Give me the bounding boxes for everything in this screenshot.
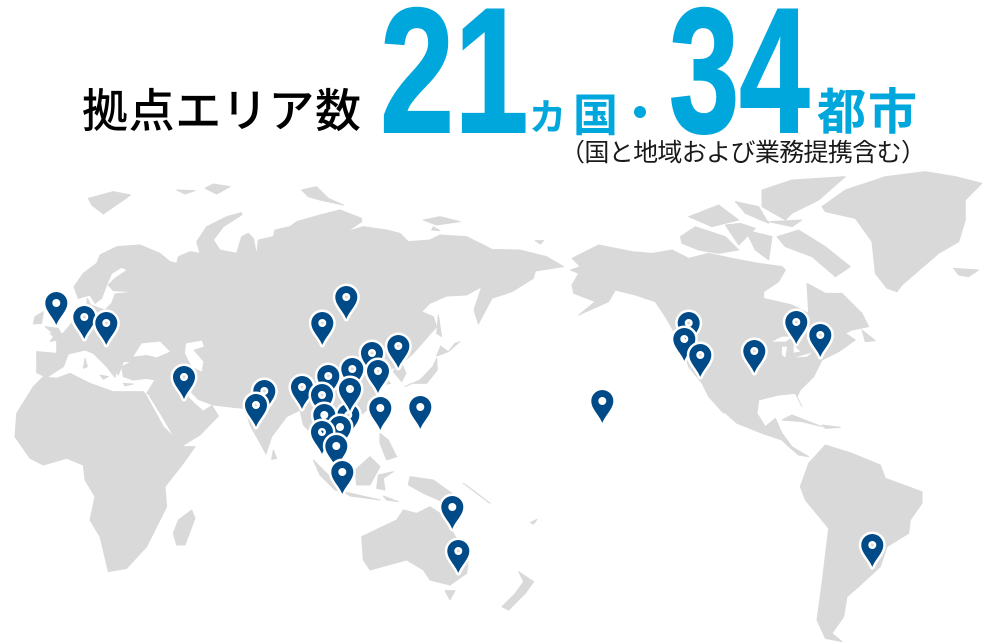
islands: Arctic <box>88 184 460 231</box>
heading: base area count: 拠点エリア数 <box>82 85 361 137</box>
landmass: South America <box>800 445 922 642</box>
landmass: Australia <box>362 507 468 600</box>
islands: Madagascar and Sri Lanka <box>173 450 277 545</box>
pins: North America <box>673 311 831 377</box>
unit: cities: 市 <box>868 86 917 140</box>
pins: Asia <box>291 286 431 494</box>
pin: South America <box>861 534 883 567</box>
pins: India <box>245 380 275 427</box>
landmass: Greenland <box>822 172 982 292</box>
note: including regions and partners: （国と地域および業務提携含む） <box>560 139 926 167</box>
islands: Caribbean and New Zealand <box>502 415 840 610</box>
islands: Japan <box>405 315 460 387</box>
map: Europe, Asia and Africa <box>15 184 564 600</box>
seas <box>133 341 212 411</box>
landmass: Africa <box>15 373 195 572</box>
location pins <box>45 286 883 573</box>
pins: Europe and Middle East <box>45 292 195 399</box>
pins: Oceania <box>441 390 613 573</box>
unit: cities: 都 <box>817 86 866 140</box>
unit: countries: カ <box>529 97 566 138</box>
world map <box>15 172 982 642</box>
separator dot <box>634 106 646 118</box>
islands: Southeast Asia <box>313 433 398 502</box>
islands: Europe and Mediterranean <box>33 312 133 386</box>
islands: New Guinea <box>408 477 490 505</box>
islands: Canadian Arctic <box>535 177 875 342</box>
landmass: North America <box>570 245 869 457</box>
island: Iceland <box>954 268 979 277</box>
unit: countries: 国 <box>573 90 618 141</box>
lakes <box>772 337 812 357</box>
landmass: Eurasia <box>37 210 564 465</box>
map: the Americas <box>502 172 982 642</box>
